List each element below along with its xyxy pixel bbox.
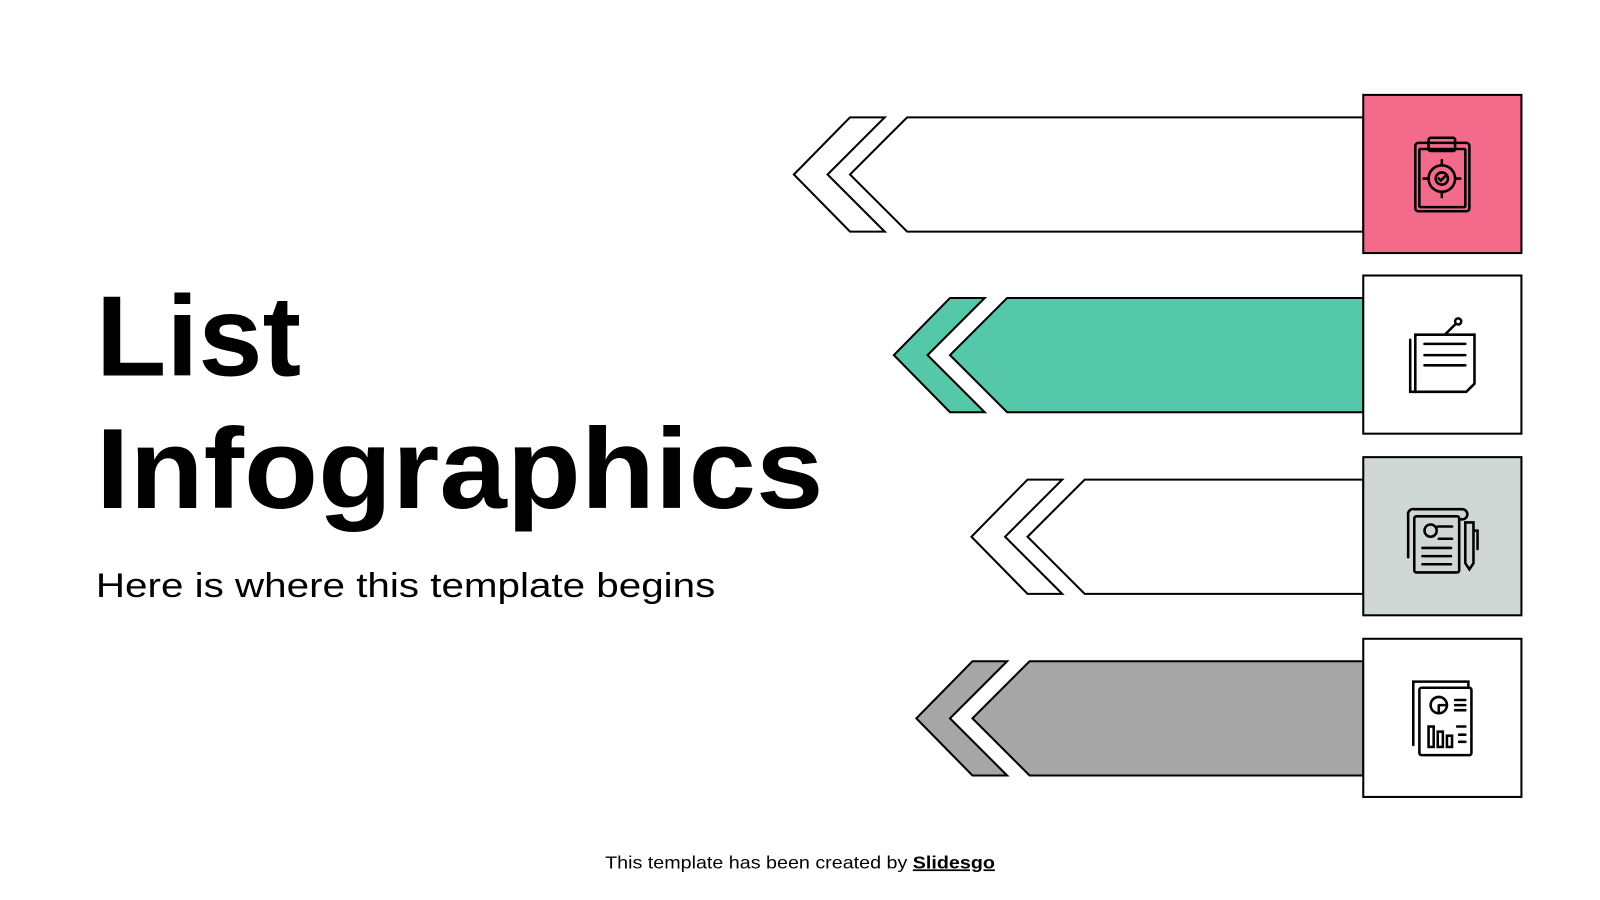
arrow 3 bbox=[971, 480, 1363, 594]
arrow 1 bbox=[794, 117, 1363, 232]
arrow 2 bbox=[894, 298, 1363, 412]
subtitle: Here is where this template begins bbox=[96, 567, 715, 605]
arrow 4 bbox=[916, 661, 1363, 776]
icon box 3: document with pen bbox=[1363, 457, 1521, 615]
footer credit: This template has been created by Slidesgo bbox=[605, 852, 995, 872]
icon box 2: note bbox=[1363, 276, 1521, 434]
title: Infographics bbox=[96, 406, 823, 533]
title bbox=[96, 274, 823, 533]
icon box 1: clipboard target bbox=[1363, 95, 1521, 253]
title: List bbox=[96, 274, 301, 401]
icon box 4: report bbox=[1363, 639, 1521, 797]
